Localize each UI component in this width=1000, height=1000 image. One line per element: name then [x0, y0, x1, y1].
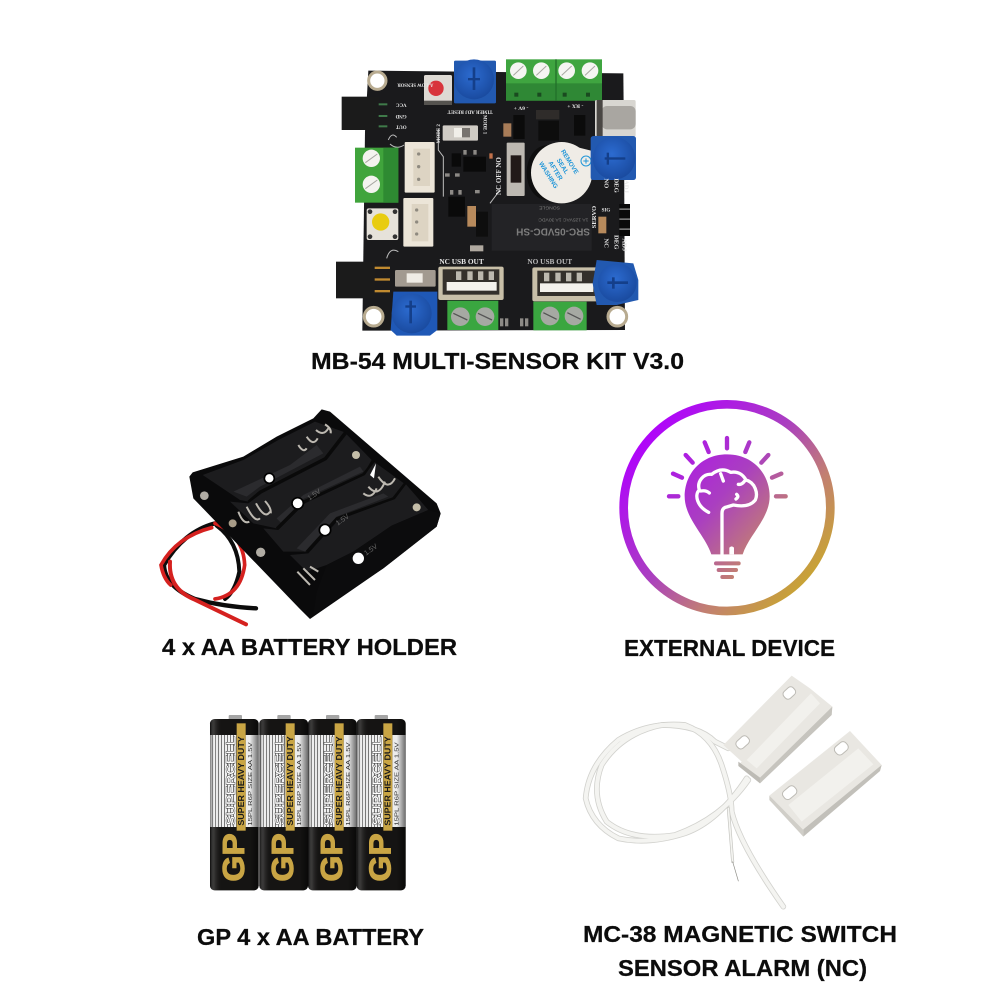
battery 3 [308, 715, 357, 890]
silkscreen labels: SERVO [591, 206, 598, 228]
silkscreen labels: NC [602, 238, 609, 248]
silkscreen labels: OUT [395, 124, 407, 129]
silkscreen labels: - RX + [567, 103, 583, 109]
spring contacts [238, 424, 395, 585]
buzzer: REMOVE [559, 149, 579, 176]
silkscreen labels: DEG [612, 178, 619, 193]
mounting holes [364, 72, 627, 326]
battery 4: SUPERCELL [370, 736, 385, 826]
mode slide switch [443, 125, 478, 141]
label: magnetic switch: SENSOR ALARM (NC) [618, 955, 867, 981]
label: magnetic switch [583, 921, 897, 981]
1.5V marks: 1.5V [307, 488, 323, 502]
silkscreen labels: NC OFF NO [495, 157, 503, 195]
silkscreen labels: ADJ [621, 238, 628, 252]
silkscreen labels: MODE 2 [437, 124, 442, 143]
relay [492, 204, 592, 251]
1.5V marks: 1.5V [335, 513, 351, 527]
buzzer: SEAL [555, 158, 570, 176]
icon: external device, lightbulb with brain [624, 404, 830, 611]
buzzer: AFTER [547, 160, 564, 182]
right blue potentiometer [591, 136, 636, 180]
relay: SONGLE [539, 205, 560, 211]
through holes [264, 463, 376, 564]
silkscreen labels: MODE 1 [481, 115, 486, 135]
contact rivets [200, 451, 421, 557]
label: battery holder: 4 x AA BATTERY HOLDER [162, 634, 457, 660]
buzzer [527, 142, 596, 203]
brain outline [697, 470, 756, 554]
light rays [669, 438, 786, 496]
silkscreen labels: - 6V + [514, 104, 528, 110]
silkscreen labels: NO [602, 178, 609, 188]
servo header pins [619, 204, 630, 236]
label: external device: EXTERNAL DEVICE [624, 635, 835, 661]
1.5V marks [307, 488, 379, 557]
silkscreen labels: GND [395, 113, 407, 118]
silkscreen labels: ADJ [622, 180, 629, 194]
battery 1: SUPER HEAVY DUTY [237, 736, 246, 826]
bottom-left blue potentiometer [391, 292, 437, 336]
label: board: MB-54 MULTI-SENSOR KIT V3.0 [311, 348, 684, 374]
1.5V marks: 1.5V [363, 543, 379, 557]
bulb filament slot [729, 546, 734, 554]
left green terminal block [355, 148, 398, 203]
divider rims [248, 432, 405, 552]
battery 1: SUPERCELL [223, 736, 238, 826]
battery 2: SUPERCELL [272, 736, 287, 826]
battery wells [203, 422, 428, 572]
battery 4: GP [364, 833, 398, 882]
magnet body [769, 731, 882, 837]
top blue potentiometer [454, 59, 496, 103]
wires [161, 523, 256, 624]
battery 4 [357, 715, 406, 890]
USB port: NC [438, 267, 504, 300]
USB port: NO [532, 267, 602, 301]
silkscreen labels [395, 81, 629, 266]
board body [362, 71, 625, 331]
silkscreen labels: VCC [395, 101, 407, 106]
bottom green terminal blocks [447, 301, 587, 330]
USB-C connector [595, 100, 636, 137]
relay: SRC-05VDC-SH [516, 225, 590, 236]
well floors [233, 445, 388, 552]
silkscreen labels: NO USB OUT [527, 257, 572, 266]
lower slide switch [395, 270, 436, 287]
product: 4xAA battery holder [161, 409, 441, 624]
wires [586, 724, 783, 907]
bulb glass [685, 454, 770, 554]
relay: 1A 125VAC 1A 30VDC [538, 216, 588, 222]
silkscreen labels: NC USB OUT [439, 257, 484, 266]
holder body [189, 409, 441, 619]
product: GP AA batteries [210, 715, 406, 890]
small SMD chips [448, 110, 606, 251]
silkscreen labels: SIG [602, 208, 610, 213]
product: MC-38 magnetic switch [586, 676, 882, 907]
battery 2 [259, 715, 308, 890]
silkscreen labels: DEG [612, 235, 619, 249]
battery 2: 15PL R6P SIZE AA 1.5V [297, 742, 303, 826]
bottom-right blue potentiometer [593, 260, 638, 305]
JST connectors [403, 142, 435, 247]
small SMD resistors [445, 150, 528, 326]
lower-left header connector [336, 262, 390, 298]
battery 2: GP [266, 833, 300, 882]
battery 1 [210, 715, 259, 890]
silkscreen labels: TIMER ADJ RESET [447, 109, 493, 114]
reset button (red) [424, 75, 452, 105]
buzzer: WASHING [537, 161, 559, 190]
board traces and arrows [387, 128, 500, 258]
top green terminal block [506, 59, 602, 101]
gradient ring [624, 404, 830, 611]
product: MB-54 circuit board [336, 59, 638, 336]
battery 3: SUPER HEAVY DUTY [335, 736, 344, 826]
NC/NO slide switch [507, 143, 525, 196]
label: magnetic switch: MC-38 MAGNETIC SWITCH [583, 921, 897, 947]
battery 2: SUPER HEAVY DUTY [286, 736, 295, 826]
battery 1: GP [217, 833, 251, 882]
yellow button [367, 208, 398, 240]
battery 1: 15PL R6P SIZE AA 1.5V [248, 742, 254, 826]
silkscreen labels: A-LOW SENSOR [397, 81, 433, 86]
battery 3: GP [315, 833, 349, 882]
switch body [723, 676, 832, 783]
top-left header connector [342, 97, 387, 130]
battery 3: SUPERCELL [321, 736, 336, 826]
front wall with tab [313, 510, 441, 615]
bulb base [716, 563, 739, 577]
battery 4: SUPER HEAVY DUTY [384, 736, 393, 826]
battery 3: 15PL R6P SIZE AA 1.5V [346, 742, 352, 826]
battery 4: 15PL R6P SIZE AA 1.5V [395, 742, 401, 826]
label: batteries: GP 4 x AA BATTERY [197, 924, 424, 950]
